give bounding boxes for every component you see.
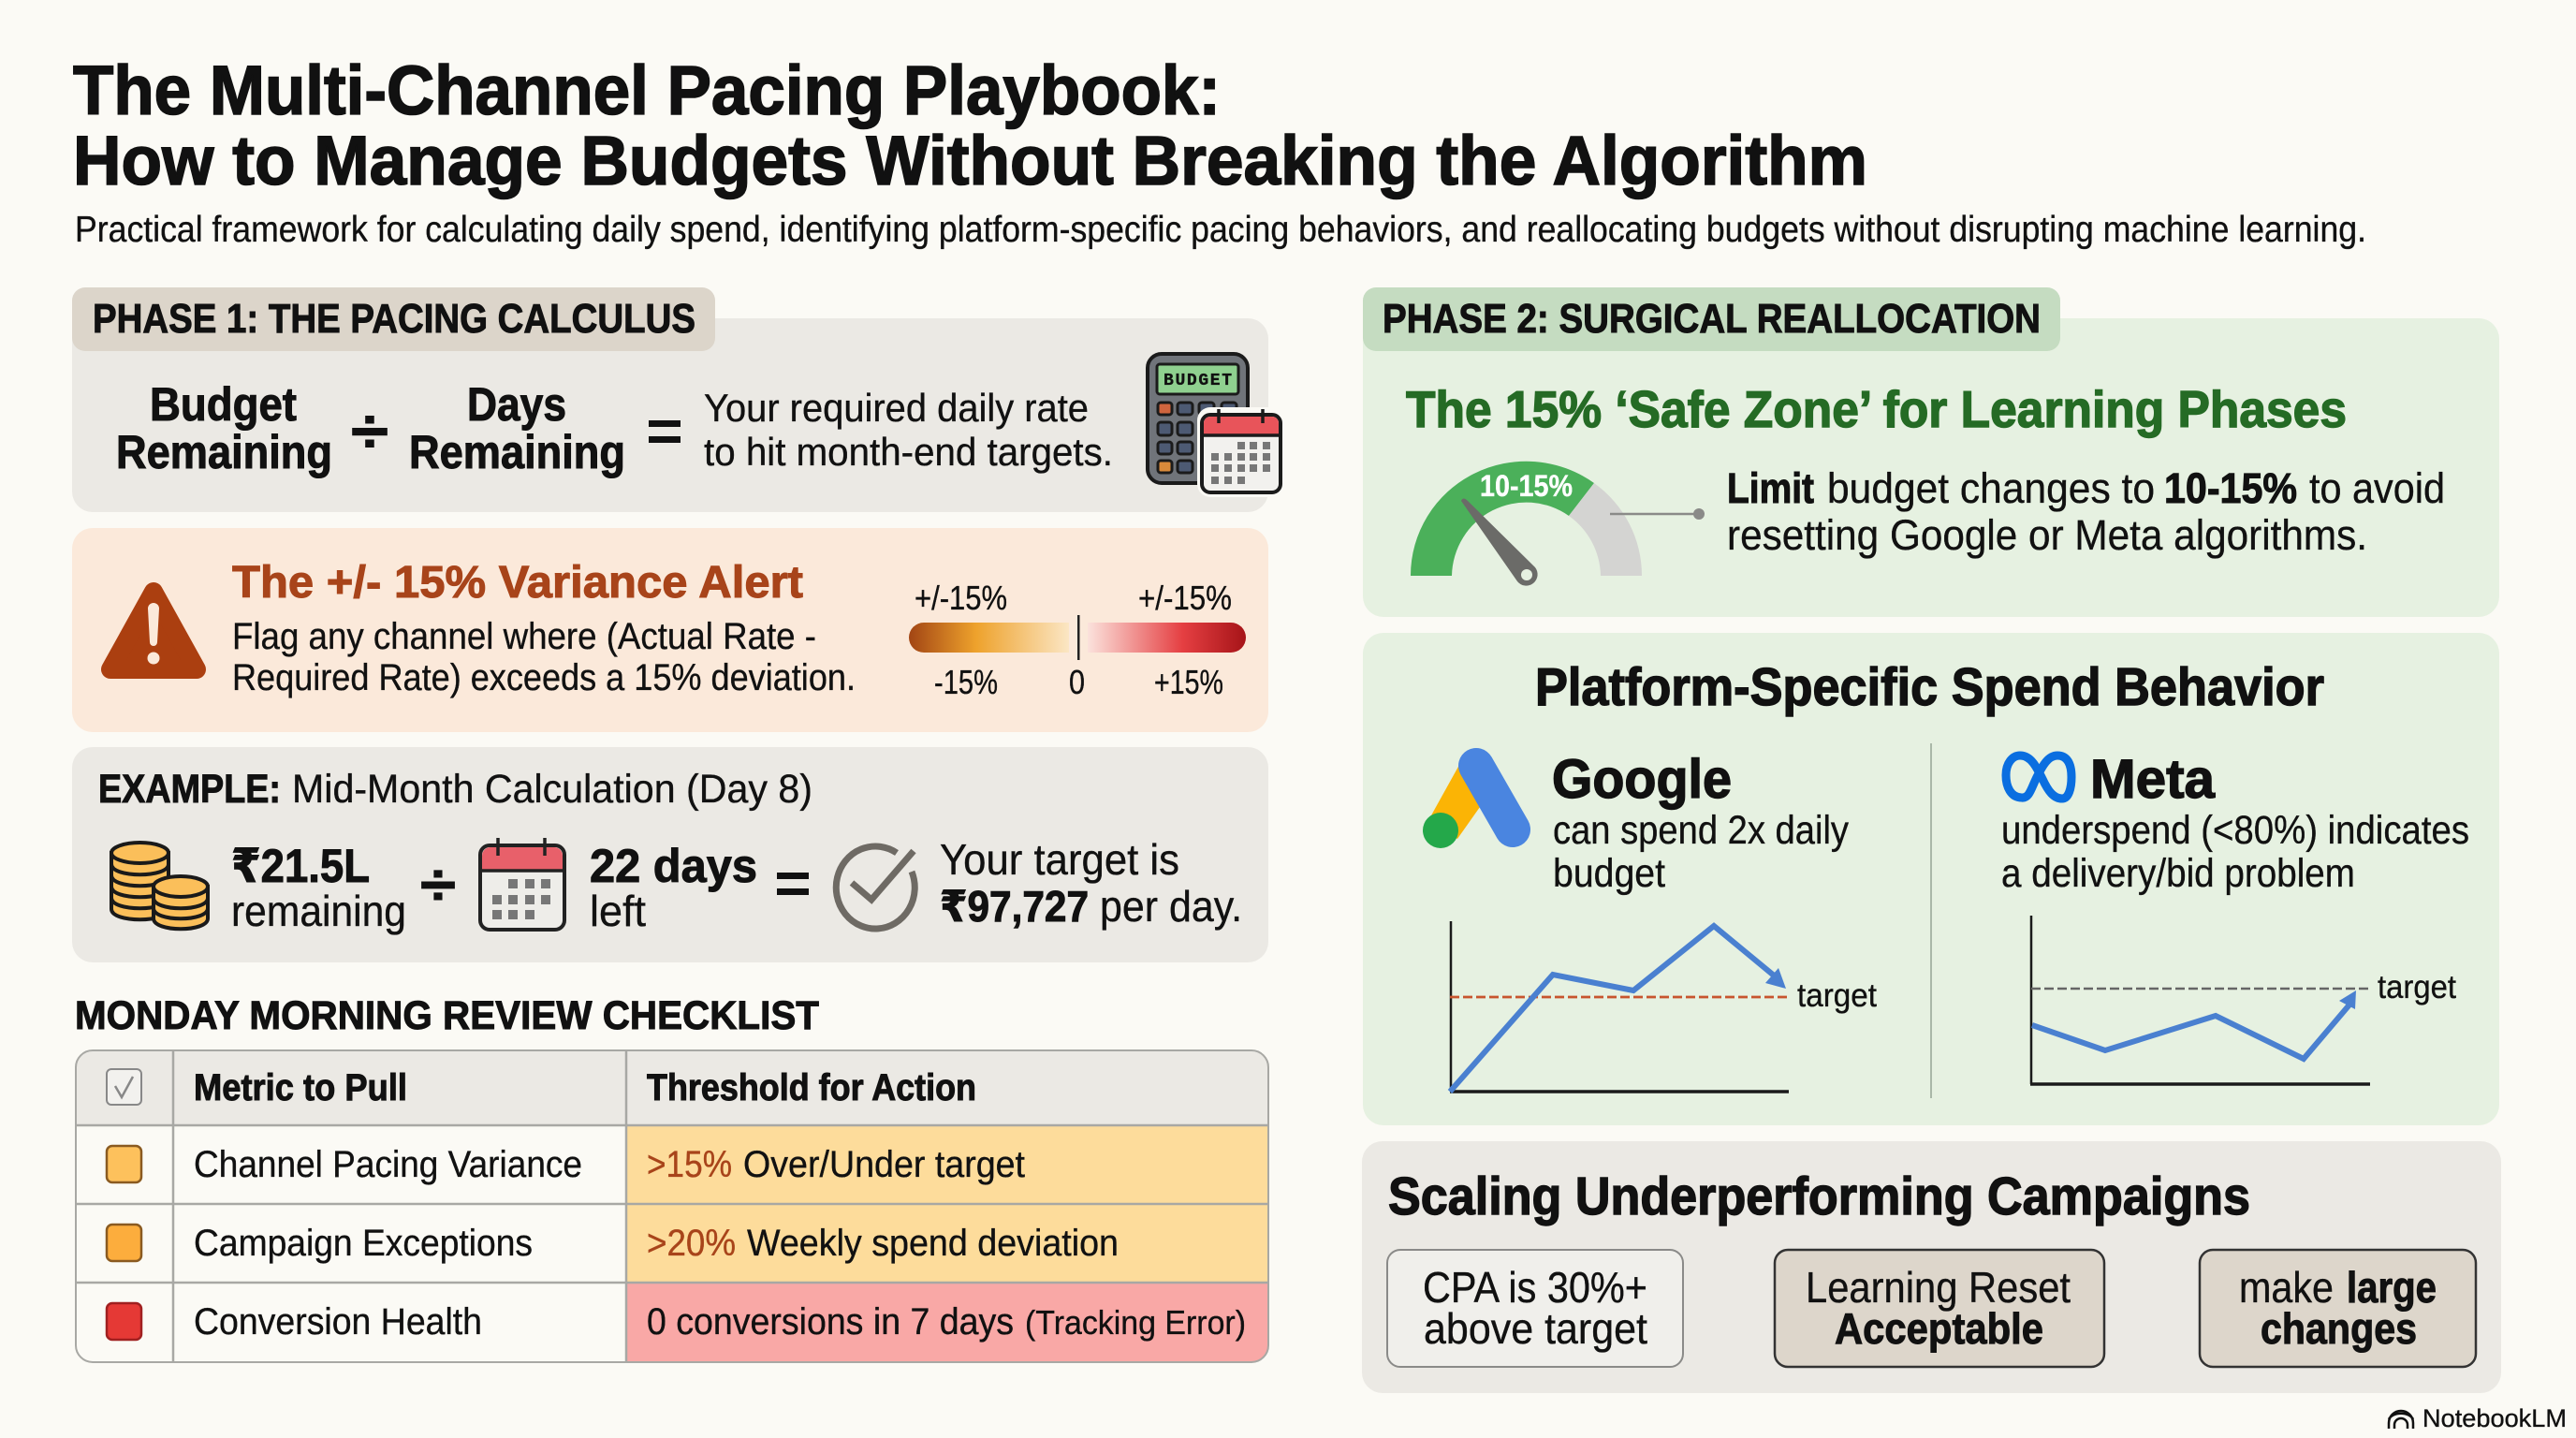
row: campaign exceptions: >20% (647, 1223, 736, 1264)
safe zone explanation: budget changes to (1827, 464, 2155, 512)
row: campaign exceptions (107, 1223, 1119, 1264)
formula: budget remaining divided by days remaining: Remaining (409, 426, 625, 478)
safe zone explanation: 10-15% (2164, 464, 2297, 512)
variance gradient scale: +/-15% (1138, 579, 1232, 617)
icon: warning triangle (110, 592, 197, 669)
meta underspend chart: target (2378, 969, 2456, 1005)
platform heading: Platform-Specific Spend Behavior (1535, 657, 2324, 717)
row: channel pacing variance (107, 1144, 1025, 1185)
days left (590, 840, 757, 935)
row: conversion health: 0 conversions in 7 days (647, 1301, 1014, 1343)
variance gradient scale: 0 (1069, 663, 1085, 701)
box: cpa above target: CPA is 30%+ (1423, 1263, 1647, 1312)
variance gradient scale (909, 579, 1246, 701)
example heading: Mid-Month Calculation (Day 8) (292, 767, 812, 812)
box: make large changes: make (2239, 1263, 2334, 1312)
safe zone explanation: resetting Google or Meta algorithms. (1727, 511, 2367, 559)
icon: calendar small (480, 838, 564, 930)
variance gradient scale: -15% (934, 663, 998, 701)
scaling heading: Scaling Underperforming Campaigns (1388, 1167, 2250, 1226)
row: conversion health: (Tracking Error) (1025, 1303, 1246, 1342)
panel: variance alert (72, 528, 1268, 732)
target result: ₹97,727 (940, 882, 1089, 931)
panel: worked example (72, 747, 1268, 962)
panel: platform-specific spend behavior (1363, 633, 2499, 1125)
alert description: Required Rate) exceeds a 15% deviation. (232, 657, 856, 698)
alert heading: The +/- 15% Variance Alert (232, 558, 803, 608)
row: channel pacing variance: >15% (647, 1144, 732, 1185)
row: channel pacing variance: Channel Pacing Variance (194, 1144, 582, 1185)
formula: budget remaining divided by days remaining (116, 378, 681, 478)
subtitle: Practical framework for calculating daily spend, identifying platform-specific pacing behaviors, and reallocating budgets without disrupting machine learning. (75, 210, 2366, 250)
gauge: 10-15% safe zone (1411, 462, 1705, 586)
target result: per day. (1100, 882, 1242, 931)
remaining budget: ₹21.5L (231, 840, 370, 892)
box: make large changes: changes (2261, 1304, 2417, 1353)
variance gradient scale: +15% (1154, 663, 1223, 701)
formula result text: Your required daily rate (704, 386, 1089, 430)
target result (940, 835, 1242, 931)
variance gradient scale: +/-15% (915, 579, 1007, 617)
gauge: 10-15% safe zone: 10-15% (1480, 469, 1573, 503)
remaining budget: remaining (231, 887, 406, 935)
formula result text (704, 386, 1113, 474)
icon: budget calculator (1148, 354, 1248, 483)
google column text (1552, 749, 1849, 896)
row: conversion health: Conversion Health (194, 1301, 482, 1343)
icon: budget calculator: BUDGET (1164, 372, 1232, 390)
days left: left (590, 887, 646, 935)
safe zone explanation: Limit (1727, 464, 1814, 512)
row: campaign exceptions: Weekly spend deviation (747, 1223, 1119, 1264)
alert description (232, 616, 856, 698)
formula: budget remaining divided by days remaining: Days (467, 378, 566, 431)
panel: phase 2 safe zone (1363, 287, 2499, 617)
google overspend chart: target (1797, 977, 1877, 1014)
title (73, 51, 1867, 199)
box: cpa above target (1387, 1250, 1683, 1367)
meta column text: underspend (<80%) indicates (2001, 808, 2469, 853)
checklist table (76, 1050, 1268, 1362)
row: channel pacing variance: Over/Under target (743, 1144, 1025, 1185)
icon: calendar (1197, 407, 1284, 497)
divide sign: ÷ (420, 853, 456, 917)
box: cpa above target: above target (1424, 1304, 1647, 1353)
icon: target check circle (836, 846, 915, 929)
formula: budget remaining divided by days remaining: Remaining (116, 426, 332, 478)
row: campaign exceptions: Campaign Exceptions (194, 1223, 533, 1264)
box: learning reset acceptable: Learning Reset (1806, 1263, 2071, 1312)
meta column text: Meta (2090, 749, 2216, 810)
icon: meta logo (2006, 756, 2071, 799)
box: make large changes: large (2347, 1263, 2437, 1312)
box: make large changes (2200, 1250, 2476, 1367)
alert description: Flag any channel where (Actual Rate - (232, 616, 816, 657)
google column text: budget (1553, 851, 1665, 896)
checklist heading: MONDAY MORNING REVIEW CHECKLIST (75, 993, 819, 1038)
row: conversion health (107, 1301, 1246, 1343)
phase 1 tab heading (72, 287, 715, 351)
notebooklm watermark: NotebookLM (2422, 1404, 2567, 1432)
remaining budget (231, 840, 406, 935)
title: The Multi-Channel Pacing Playbook: (73, 51, 1221, 129)
phase 2 tab heading: PHASE 2: SURGICAL REALLOCATION (1383, 296, 2041, 342)
meta underspend chart (2030, 916, 2456, 1084)
formula result text: to hit month-end targets. (704, 430, 1113, 474)
google column text: can spend 2x daily (1553, 808, 1849, 853)
target result: Your target is (940, 835, 1179, 884)
days left: 22 days (590, 840, 757, 892)
meta column text: a delivery/bid problem (2001, 851, 2355, 896)
formula: budget remaining divided by days remaining: Budget (150, 378, 297, 431)
icon: coin stacks (111, 843, 208, 929)
google overspend chart (1450, 921, 1877, 1092)
google column text: Google (1552, 749, 1732, 810)
safe zone explanation: to avoid (2309, 464, 2445, 512)
icon: google ads logo (1423, 765, 1513, 848)
phase 1 tab heading: PHASE 1: THE PACING CALCULUS (93, 296, 695, 342)
title: How to Manage Budgets Without Breaking the Algorithm (73, 122, 1867, 199)
equals sign (777, 873, 809, 895)
formula: budget remaining divided by days remaining: ÷ (351, 396, 388, 465)
header checkbox (107, 1069, 141, 1105)
example heading: EXAMPLE: (98, 767, 281, 812)
table header labels: Metric to Pull (194, 1067, 407, 1108)
panel: scaling underperforming campaigns (1362, 1141, 2501, 1393)
box: learning reset acceptable: Acceptable (1835, 1304, 2043, 1353)
table header labels (194, 1067, 976, 1108)
phase 2 tab heading (1363, 287, 2060, 351)
safe zone explanation (1727, 464, 2445, 559)
divider (1930, 743, 1932, 1098)
panel: phase 1 pacing calculus (72, 287, 1284, 512)
safe zone heading: The 15% ‘Safe Zone’ for Learning Phases (1406, 380, 2347, 438)
meta column text (2001, 749, 2469, 896)
box: learning reset acceptable (1775, 1250, 2104, 1367)
table header labels: Threshold for Action (647, 1067, 976, 1108)
